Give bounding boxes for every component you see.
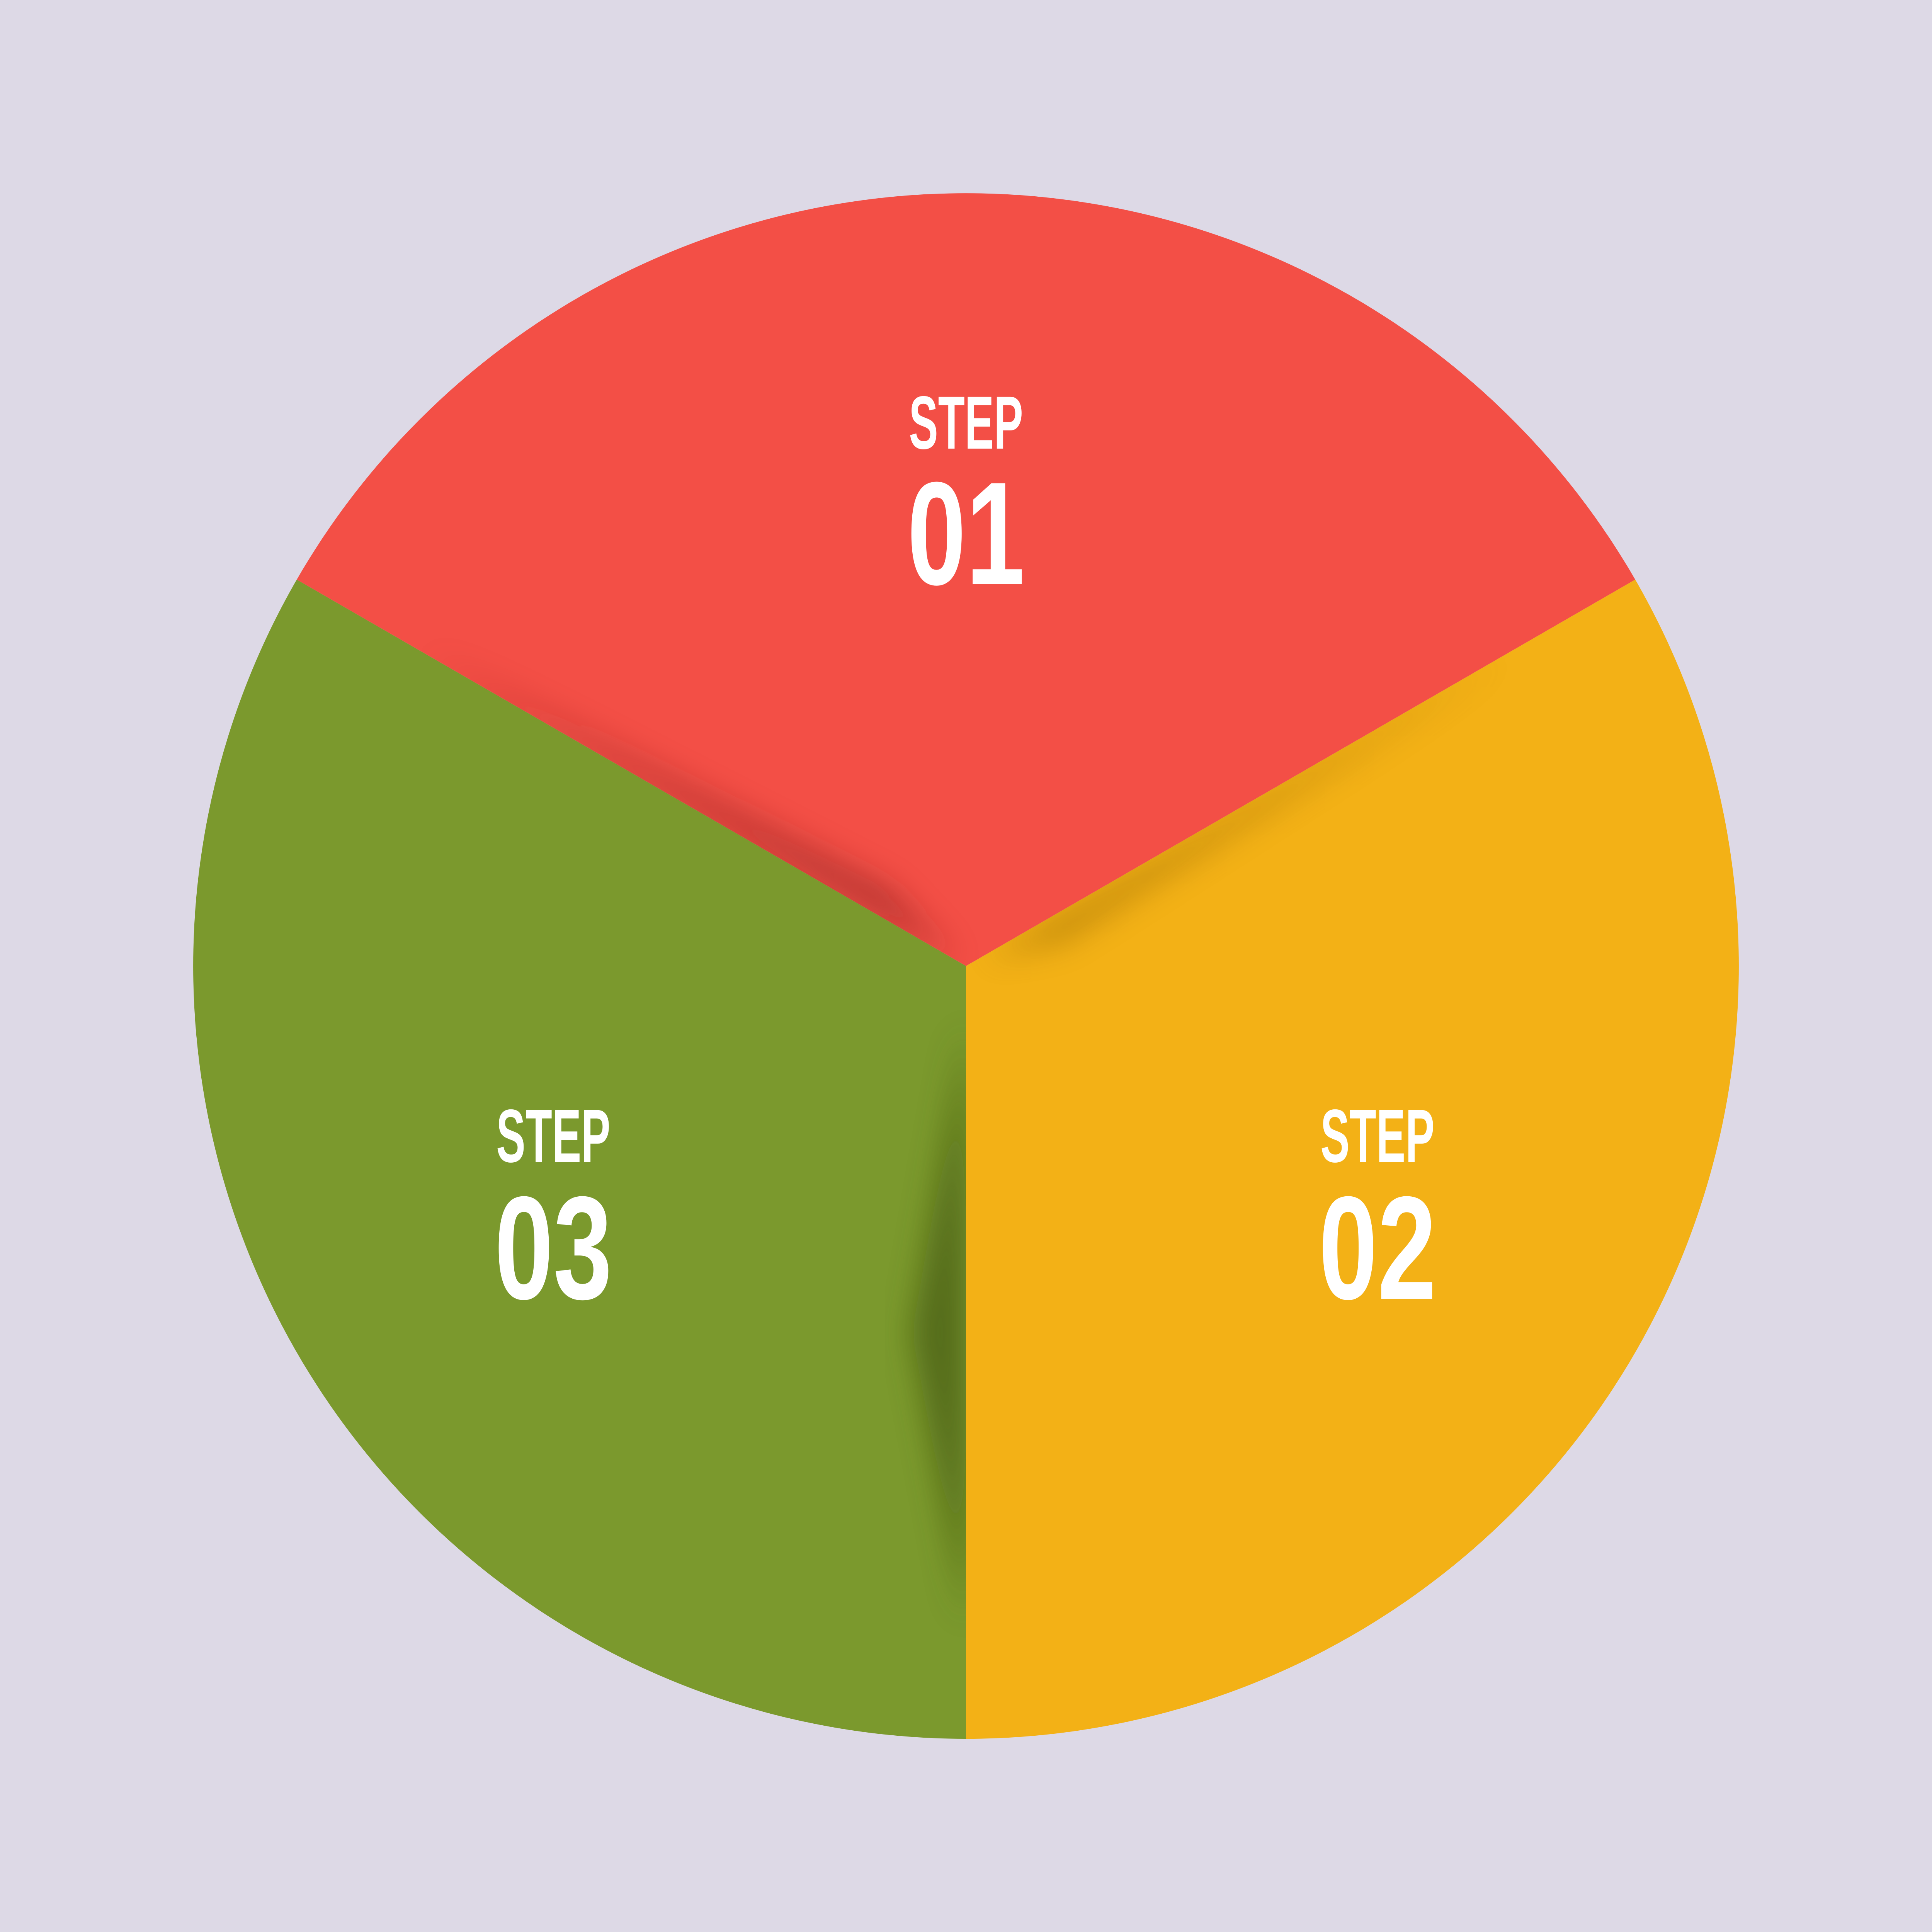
label: step 01: STEP xyxy=(909,381,1023,465)
label: step 01: 01 xyxy=(907,452,1025,616)
infographic: three-step pie chart xyxy=(193,193,1739,1739)
panel: step 02 slice xyxy=(966,580,1739,1739)
label: step 03 xyxy=(495,1094,612,1330)
label: step 01 xyxy=(907,381,1025,616)
label: step 02: STEP xyxy=(1320,1094,1435,1178)
label: step 02 xyxy=(1319,1094,1436,1330)
label: step 02: 02 xyxy=(1319,1166,1436,1330)
panel: step 03 slice xyxy=(193,580,966,1739)
label: step 03: STEP xyxy=(496,1094,611,1178)
label: step 03: 03 xyxy=(495,1166,612,1330)
panel: step 01 slice xyxy=(297,193,1635,966)
